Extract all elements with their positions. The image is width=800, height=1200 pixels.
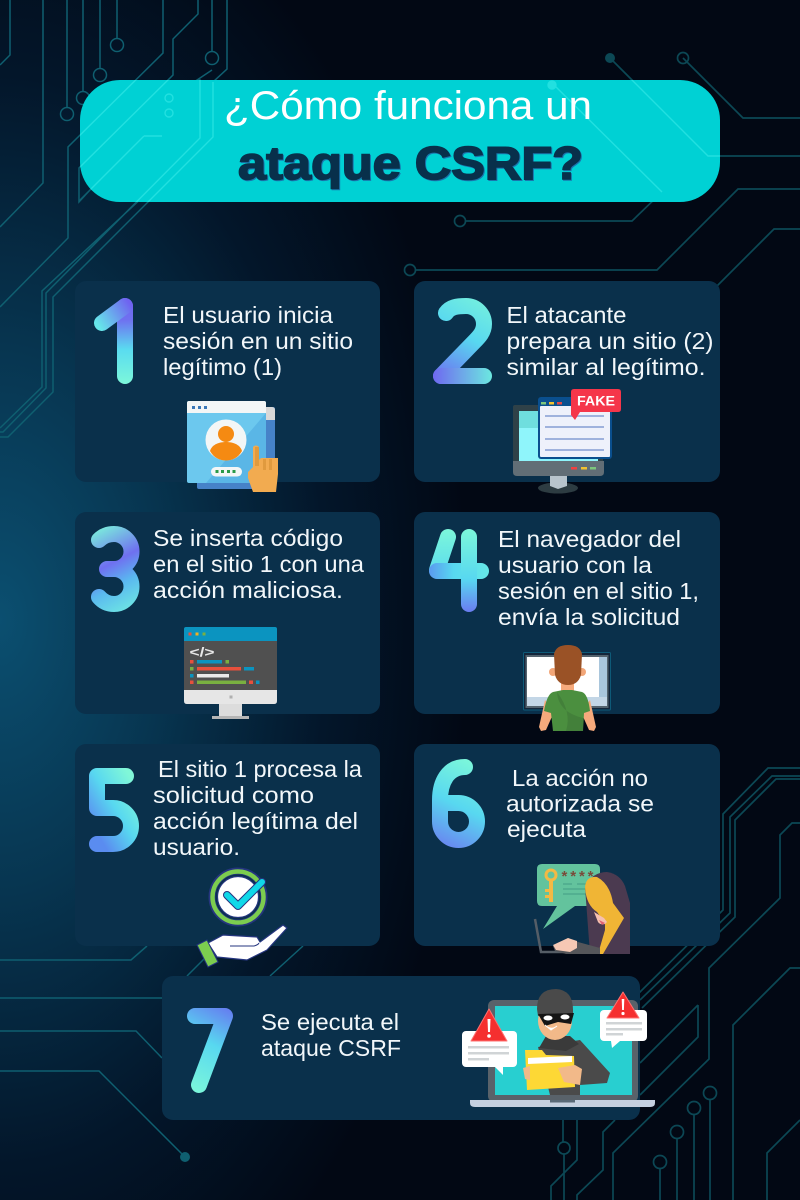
title line 2: ataque CSRF? xyxy=(238,137,583,189)
text: step 4: usuario con la xyxy=(498,552,652,578)
title line 1: ¿Cómo funciona un xyxy=(224,84,592,128)
number 7 xyxy=(195,1016,225,1085)
text: step 7 xyxy=(261,1009,401,1061)
text: step 3: acción maliciosa. xyxy=(153,577,343,603)
text: step 6: autorizada se xyxy=(506,790,654,816)
panel: step 1 xyxy=(75,281,380,492)
icon: hooded hacker with key: **** xyxy=(562,868,594,885)
text: step 5 xyxy=(153,756,362,860)
panel: step 7 xyxy=(162,976,655,1120)
text: step 2: prepara un sitio (2) xyxy=(506,328,714,354)
panel: step 3 xyxy=(75,512,380,719)
text: step 5: El sitio 1 procesa la xyxy=(158,756,362,782)
text: step 5: acción legítima del xyxy=(153,808,358,834)
circuit traces: bottom left xyxy=(0,946,303,1162)
icon: person at computer xyxy=(524,645,610,731)
text: step 1: El usuario inicia xyxy=(163,302,333,328)
panel: step 6 xyxy=(414,744,720,954)
circuit traces: top left xyxy=(0,0,227,437)
text: step 5: solicitud como xyxy=(153,782,314,808)
number 6 xyxy=(440,767,477,840)
circuit traces: top right xyxy=(404,52,800,286)
number 4 xyxy=(437,537,481,604)
text: step 1: sesión en un sitio xyxy=(163,328,353,354)
text: step 3: en el sitio 1 con una xyxy=(153,551,364,577)
text: step 4: sesión en el sitio 1, xyxy=(498,578,699,604)
icon: fake site on monitor: FAKE xyxy=(577,394,615,408)
icon: code monitor: </> xyxy=(190,644,215,660)
panel: step 4 xyxy=(414,512,720,731)
text: step 2 xyxy=(506,302,714,380)
circuit traces: bottom right xyxy=(551,768,800,1200)
number 3 xyxy=(99,534,132,604)
text: step 1 xyxy=(163,302,353,380)
text: step 2: El atacante xyxy=(506,302,626,328)
icon: check mark over hand xyxy=(197,871,287,967)
number 1 xyxy=(102,306,125,376)
number 5 xyxy=(97,776,131,844)
number 2 xyxy=(441,306,484,376)
text: step 5: usuario. xyxy=(153,834,240,860)
title banner xyxy=(80,80,720,202)
text: step 4 xyxy=(498,526,699,630)
icon: thief emerging from laptop with alerts xyxy=(462,989,655,1107)
panel: step 2 xyxy=(414,281,720,494)
text: step 3 xyxy=(153,525,364,603)
text: step 3: Se inserta código xyxy=(153,525,343,551)
icon: fake site on monitor xyxy=(513,389,621,494)
text: step 7: Se ejecuta el xyxy=(261,1009,399,1035)
icon: login window with hand xyxy=(187,401,278,492)
text: step 2: similar al legítimo. xyxy=(506,354,706,380)
text: step 4: envía la solicitud xyxy=(498,604,680,630)
text: step 6: La acción no xyxy=(512,765,648,791)
icon: hooded hacker with key xyxy=(535,864,630,954)
text: step 7: ataque CSRF xyxy=(261,1035,401,1061)
icon: code monitor xyxy=(184,627,277,719)
panel: step 5 xyxy=(75,744,380,967)
text: step 4: El navegador del xyxy=(498,526,681,552)
text: step 6 xyxy=(506,765,654,842)
text: step 1: legítimo (1) xyxy=(163,354,282,380)
text: step 6: ejecuta xyxy=(507,816,586,842)
